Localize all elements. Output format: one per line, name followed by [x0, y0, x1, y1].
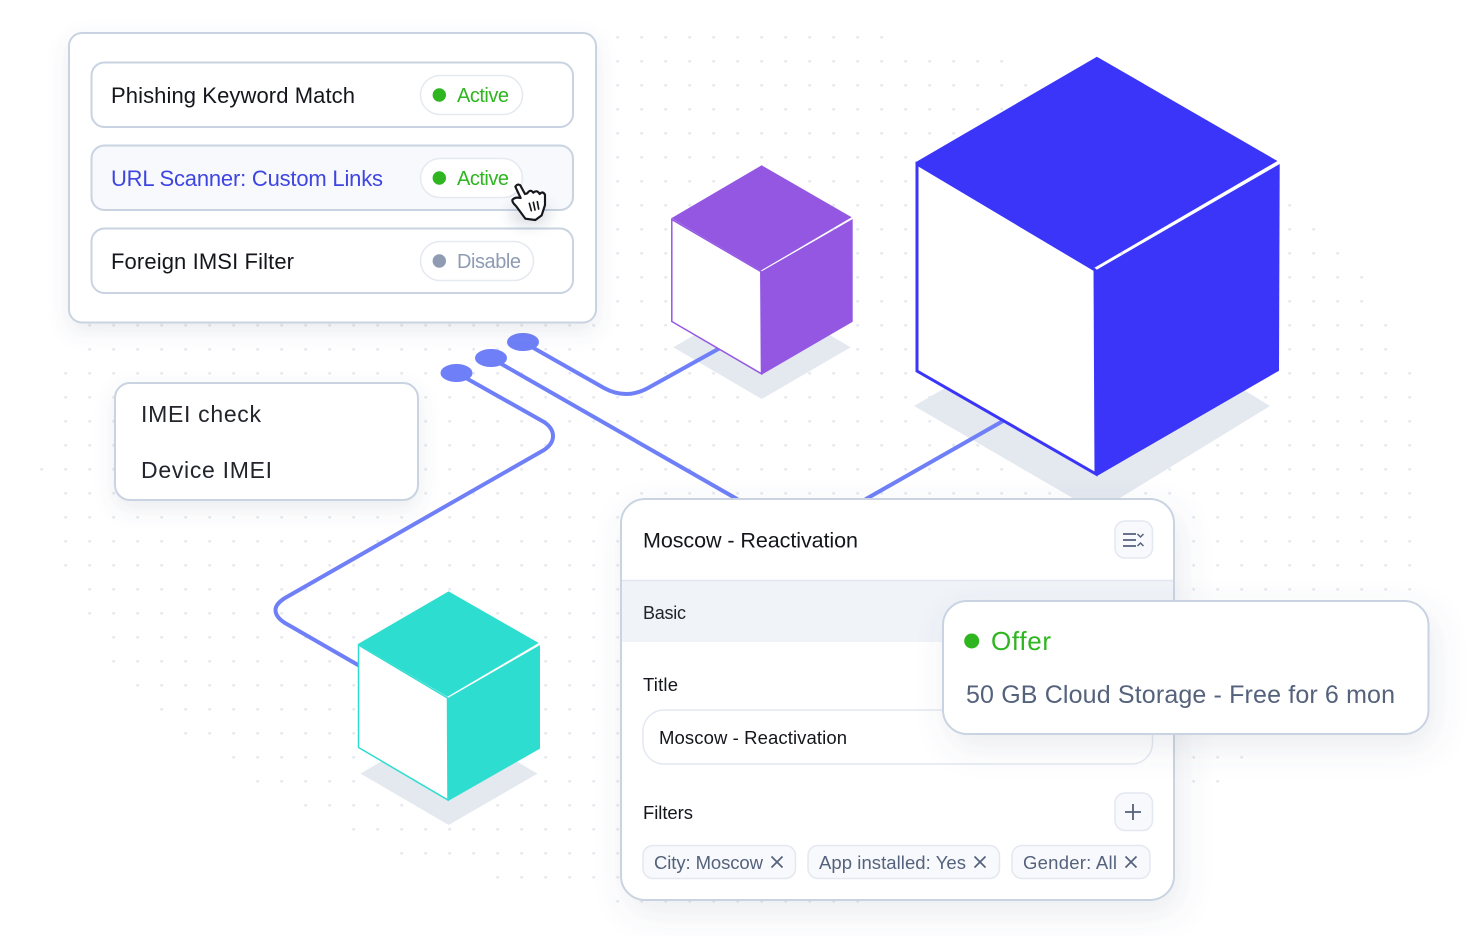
- text: Device IMEI: Device IMEI: [141, 457, 272, 483]
- offer description: 50 GB Cloud Storage - Free for 6 mon: [966, 681, 1395, 709]
- chip: Gender: [1012, 846, 1150, 878]
- row: URL scanner: Active: [457, 168, 509, 190]
- chip: City: [643, 846, 796, 878]
- icon: add filter button: [1115, 793, 1152, 830]
- chip: Gender: Gender: All: [1023, 852, 1117, 873]
- panel: IMEI box: [115, 383, 418, 500]
- row: URL scanner: [92, 146, 573, 210]
- chip: City: City: Moscow: [654, 852, 764, 873]
- row: URL scanner: URL Scanner: Custom Links: [111, 166, 383, 191]
- panel: campaign form: [621, 499, 1174, 900]
- field input: Title: Moscow - Reactivation: [659, 727, 847, 748]
- icon: hand cursor: [510, 185, 550, 226]
- row: phishing keyword match: Phishing Keyword Match: [111, 83, 355, 108]
- field label: Filters: Filters: [643, 802, 693, 823]
- connector lines: [276, 342, 1003, 665]
- row: phishing keyword match: Active: [457, 85, 509, 107]
- section band: Basic: [622, 580, 1173, 642]
- offer status dot: [964, 634, 979, 648]
- purple cube: [671, 165, 853, 375]
- icon: collapse list button: [1115, 521, 1152, 558]
- panel: rule list: [69, 33, 596, 322]
- field label: Title: Title: [643, 674, 678, 695]
- row: phishing keyword match: [92, 62, 573, 127]
- row: foreign IMSI filter: Disable: [457, 251, 521, 273]
- form heading: Moscow - Reactivation: [643, 528, 858, 552]
- section band: Basic: Basic: [643, 603, 686, 623]
- text: IMEI check: IMEI check: [141, 401, 262, 427]
- row: foreign IMSI filter: [92, 228, 573, 293]
- offer heading: Offer: [991, 626, 1051, 656]
- chip: App installed: [808, 846, 1000, 878]
- field input: Title: [643, 710, 1152, 764]
- cube floor shadows: [360, 296, 1270, 825]
- connector end nodes: [440, 333, 539, 382]
- blue cube: [916, 57, 1280, 476]
- teal cube: [358, 591, 540, 801]
- chip: App installed: App installed: Yes: [819, 852, 966, 873]
- row: foreign IMSI filter: Foreign IMSI Filter: [111, 249, 294, 274]
- callout: offer card: [943, 601, 1428, 734]
